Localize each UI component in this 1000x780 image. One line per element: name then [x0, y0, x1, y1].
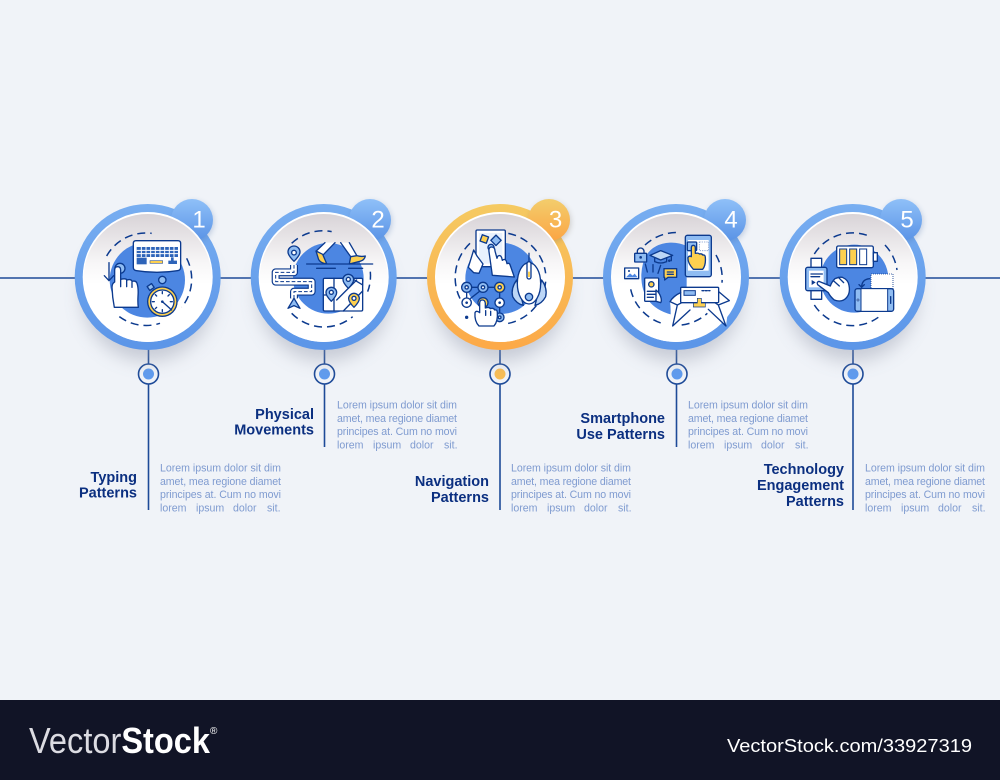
badge number 2: 2 — [371, 206, 385, 234]
description 3: ipsum — [547, 502, 575, 514]
badge 4 — [704, 199, 747, 243]
badge number 1: 1 — [192, 206, 206, 234]
icon: tablet, node pattern and mouse — [455, 230, 546, 326]
inner disc 1 — [83, 212, 213, 342]
description 3: lorem — [511, 502, 538, 514]
description 1: dolor — [233, 502, 257, 514]
step 3: navigation patterns — [415, 199, 632, 514]
description 5: amet, mea regione diamet — [865, 476, 985, 488]
description 1: ipsum — [196, 502, 224, 514]
heading 2: Physical — [255, 407, 314, 423]
description 1: principes at. Cum no movi — [160, 489, 281, 501]
connector line 4 — [676, 345, 678, 447]
badge 2 — [349, 199, 392, 243]
description 5: Lorem ipsum dolor sit dim — [865, 462, 985, 474]
step 2: physical movements — [234, 199, 458, 452]
description 4: lorem — [688, 440, 715, 452]
description 5: lorem — [865, 502, 892, 514]
footer image id: VectorStock.com/33927319 — [727, 736, 972, 756]
step 5: technology engagement patterns — [757, 199, 986, 514]
heading 5: Engagement — [757, 478, 844, 494]
badge number 3: 3 — [549, 206, 562, 234]
icon: smartwatch, battery and rotating phone — [806, 233, 897, 326]
heading 1: Patterns — [79, 486, 137, 502]
heading 5: Technology — [764, 462, 844, 478]
description 2: dolor — [410, 440, 434, 452]
outer ring 2 — [251, 204, 397, 361]
description 4: ipsum — [724, 440, 752, 452]
description 4: principes at. Cum no movi — [688, 426, 808, 438]
description 1: lorem — [160, 502, 187, 514]
inner disc 3 — [435, 212, 565, 342]
node marker 4 — [667, 364, 687, 384]
badge number 5: 5 — [900, 206, 914, 234]
outer ring 1 — [75, 204, 221, 361]
node marker 5 — [843, 364, 863, 384]
icon: smartphone apps and handheld console — [625, 233, 729, 326]
description 3: Lorem ipsum dolor sit dim — [511, 462, 631, 474]
description 4: Lorem ipsum dolor sit dim — [688, 400, 808, 412]
outer ring 4 — [603, 204, 749, 361]
description 4: dolor — [761, 440, 785, 452]
node marker 3 — [490, 364, 510, 384]
description 5: sit. — [972, 502, 986, 514]
icon: walking feet, route and map — [276, 231, 373, 327]
description 5: ipsum — [901, 502, 929, 514]
description 2: lorem — [337, 440, 364, 452]
description 2: principes at. Cum no movi — [337, 426, 457, 438]
description 3: dolor — [584, 502, 608, 514]
description 2: Lorem ipsum dolor sit dim — [337, 400, 457, 412]
connector line 5 — [852, 345, 854, 510]
heading 1: Typing — [91, 470, 137, 486]
description 4: amet, mea regione diamet — [688, 413, 808, 425]
description 5: dolor — [938, 502, 962, 514]
description 2: amet, mea regione diamet — [337, 413, 457, 425]
heading 4: Smartphone — [580, 411, 665, 427]
heading 3: Navigation — [415, 474, 489, 490]
description 4: sit. — [795, 440, 809, 452]
description 3: amet, mea regione diamet — [511, 476, 631, 488]
badge number 4: 4 — [724, 206, 738, 234]
outer ring 5 — [780, 204, 926, 361]
registered mark: ® — [210, 726, 218, 737]
description 1: amet, mea regione diamet — [160, 476, 281, 488]
inner disc 2 — [259, 212, 389, 342]
description 1: Lorem ipsum dolor sit dim — [160, 462, 281, 474]
horizontal timeline line — [0, 277, 1000, 279]
heading 2: Movements — [234, 422, 314, 438]
connector line 2 — [324, 345, 326, 447]
description 2: sit. — [444, 440, 458, 452]
connector line 3 — [499, 345, 501, 510]
badge 5 — [880, 199, 923, 243]
node marker 1 — [138, 364, 158, 384]
step 1: typing patterns — [75, 199, 281, 514]
heading 3: Patterns — [431, 490, 489, 506]
footer logo: VectorStock — [29, 720, 211, 761]
inner disc 4 — [611, 212, 741, 342]
step 4: smartphone use patterns — [576, 199, 809, 452]
description 3: sit. — [618, 502, 632, 514]
footer bar — [0, 700, 1000, 780]
connector line 1 — [148, 345, 150, 510]
heading 4: Use Patterns — [576, 427, 665, 443]
badge 3 — [528, 199, 571, 243]
badge 1 — [171, 199, 214, 243]
description 5: principes at. Cum no movi — [865, 489, 985, 501]
icon: keyboard, hand and stopwatch — [104, 233, 192, 326]
node marker 2 — [314, 364, 334, 384]
description 2: ipsum — [373, 440, 401, 452]
heading 5: Patterns — [786, 494, 844, 510]
description 3: principes at. Cum no movi — [511, 489, 631, 501]
inner disc 5 — [788, 212, 918, 342]
outer ring 3 — [427, 204, 573, 361]
description 1: sit. — [267, 502, 281, 514]
